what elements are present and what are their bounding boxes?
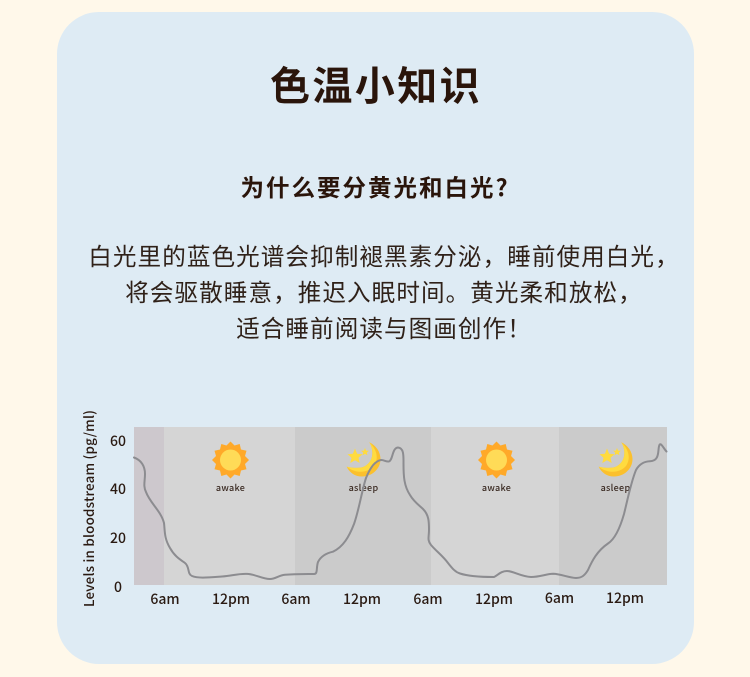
x axis ticks: 6am [545, 588, 574, 608]
title: 色温小知识 [270, 54, 482, 112]
chart background bands [134, 427, 667, 585]
x axis ticks: 6am [413, 589, 443, 609]
x axis ticks: 12pm [212, 589, 250, 609]
icon: sun 1 [212, 442, 249, 478]
y axis title: Levels in bloodstream (pg/ml) [78, 410, 98, 607]
x axis ticks: 12pm [606, 588, 644, 608]
icon: moon 1 [347, 442, 380, 476]
x axis ticks: 12pm [475, 589, 513, 609]
state labels: awake [482, 481, 511, 494]
x axis ticks [150, 588, 644, 609]
state labels [216, 481, 630, 494]
melatonin curve [134, 444, 666, 579]
x axis ticks: 12pm [343, 589, 381, 609]
icon: sun 2 [478, 442, 515, 478]
text block: explanation: 适合睡前阅读与图画创作！ [236, 310, 532, 344]
x axis ticks: 6am [150, 589, 180, 609]
text block: explanation: 白光里的蓝色光谱会抑制褪黑素分泌，睡前使用白光， [88, 238, 680, 272]
state labels: asleep [349, 481, 378, 494]
y axis ticks: 20 [110, 528, 126, 548]
text block: explanation [88, 238, 680, 344]
x axis ticks: 6am [281, 589, 311, 609]
text block: explanation: 将会驱散睡意，推迟入眠时间。黄光柔和放松， [125, 274, 643, 308]
state labels: asleep [601, 481, 630, 494]
icon: moon 2 [599, 442, 632, 476]
y axis ticks: 0 [114, 577, 122, 597]
y axis ticks [110, 431, 126, 597]
y axis ticks: 40 [110, 479, 126, 499]
subheading: 为什么要分黄光和白光? [240, 169, 510, 203]
state labels: awake [216, 481, 245, 494]
y axis ticks: 60 [110, 431, 126, 451]
